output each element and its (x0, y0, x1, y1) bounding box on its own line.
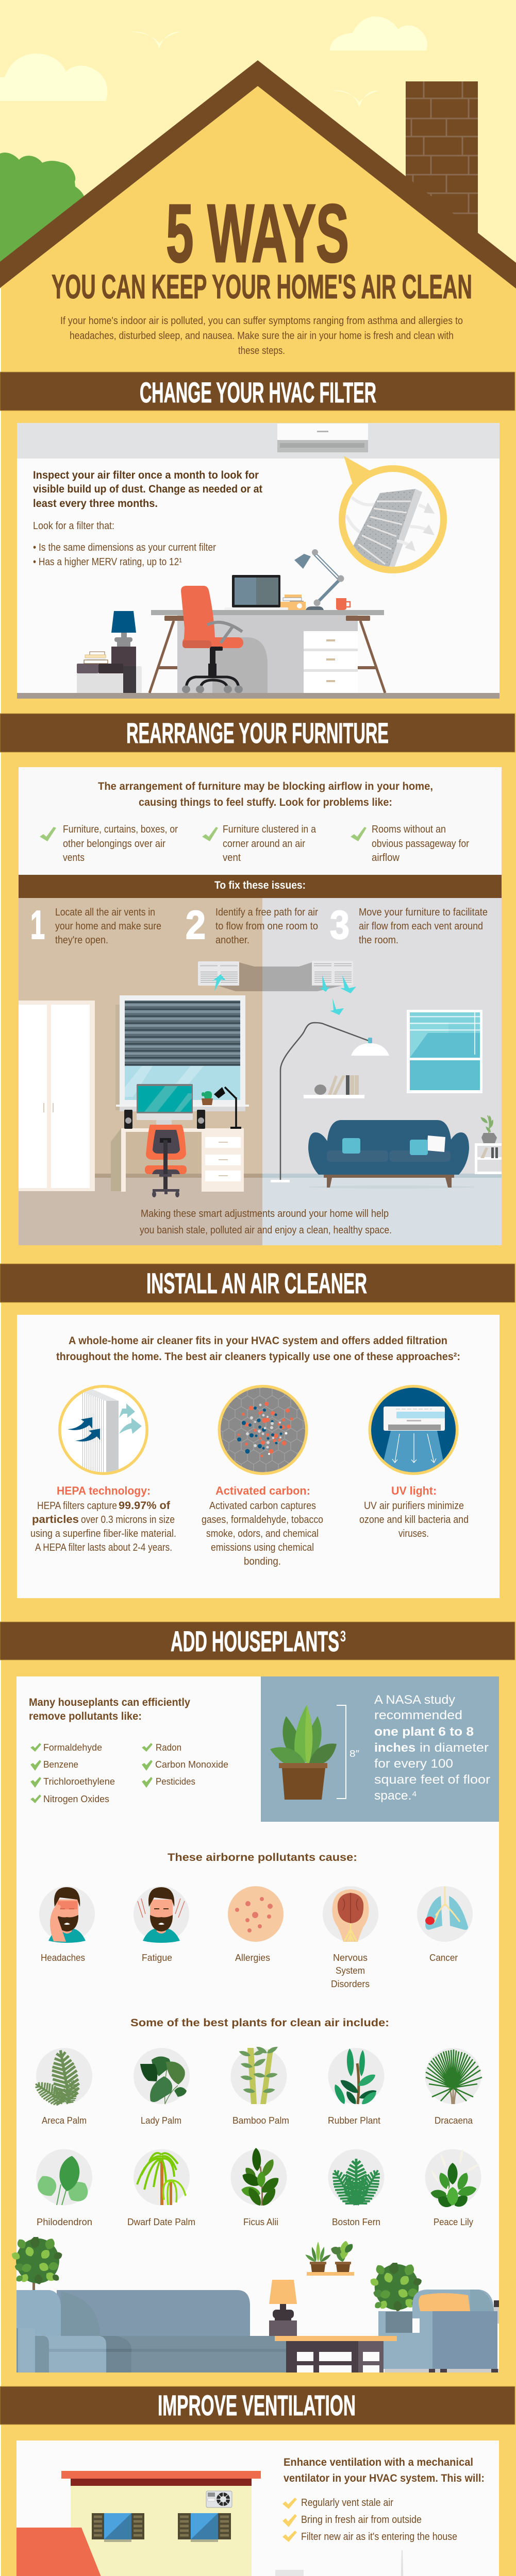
checklist: ventilator benefits: Bring in fresh air from outside (301, 2514, 422, 2526)
arrows: airflow (202, 974, 356, 1015)
icon: hepa filter (58, 1385, 148, 1479)
column: activated carbon text: Activated carbon: (215, 1484, 310, 1497)
panel: houseplants (10, 1676, 499, 2372)
icon: check 1 (40, 827, 56, 841)
column: uv light text (359, 1484, 469, 1539)
symptom: allergies (228, 1886, 284, 1963)
step 1: Locate all the air vents in (55, 906, 155, 918)
illustration: blue sofa (308, 1120, 475, 1189)
panel: room illustration with steps (19, 898, 502, 1245)
text block: inspect filter (33, 469, 262, 568)
plant: bamboo palm (231, 2045, 289, 2126)
column: hepa text: A HEPA filter lasts about 2-4 years. (35, 1541, 172, 1553)
illustration: coffee table (275, 2336, 397, 2372)
heading: air cleaner (56, 1335, 460, 1363)
illustration: large sofa (16, 2290, 287, 2372)
problem 2 (223, 823, 317, 863)
symptom: fatigue: Fatigue (142, 1952, 172, 1963)
illustration: imac and speakers (124, 1084, 205, 1129)
problem 3: obvious passageway for (372, 838, 469, 850)
column: activated carbon text: emissions using chemical (211, 1541, 314, 1553)
plant: philodendron (34, 2149, 93, 2227)
pollutants list: Many houseplants can efficiently (29, 1697, 190, 1708)
problem 2: vent (223, 852, 241, 863)
panel: air cleaner approaches (17, 1315, 500, 1598)
checklist: ventilator benefits: Regularly vent stale air (301, 2497, 393, 2509)
illustration: mug (336, 598, 350, 610)
plant: lady palm (134, 2048, 190, 2126)
step 1: they're open. (55, 934, 108, 946)
icon: activated carbon (218, 1385, 308, 1475)
heading: furniture (98, 781, 433, 808)
pollutants list (29, 1697, 228, 1804)
heading: ventilation (284, 2456, 485, 2484)
illustration: laptop (224, 575, 288, 610)
symptom: fatigue (134, 1886, 189, 1963)
icon: outdoor fan unit (206, 2491, 232, 2507)
symptom: nervous system disorders: Disorders (331, 1978, 370, 1989)
section banner: improve ventilation (0, 2386, 515, 2425)
heading: best plants: Some of the best plants for clean air include: (130, 2017, 389, 2029)
chimney (406, 81, 478, 293)
column: uv light text: UV air purifiers minimize (364, 1500, 464, 1512)
plant: bamboo palm: Bamboo Palm (232, 2115, 289, 2126)
pollutants list: remove pollutants like: (29, 1710, 142, 1722)
icon: 8 inch bracket (337, 1705, 360, 1799)
pollutants list: Formaldehyde (43, 1742, 102, 1753)
plant: dwarf date palm (127, 2149, 195, 2227)
step 3 (330, 902, 488, 947)
icon: vent right (312, 961, 353, 985)
column: hepa text: particles (32, 1514, 79, 1526)
column: uv light text: viruses. (398, 1528, 429, 1539)
plant: areca palm (31, 2048, 92, 2126)
step 3: Move your furniture to facilitate (359, 906, 488, 918)
pollutants list: Benzene (43, 1759, 78, 1770)
sky background (0, 0, 516, 289)
illustration: armchair and planter (378, 2290, 499, 2372)
panel: hvac filter room (17, 423, 500, 699)
plant: peace lily (425, 2148, 481, 2227)
illustration: skyline (252, 2550, 499, 2576)
step 2: 2 (186, 902, 206, 947)
window row top right (178, 2513, 231, 2542)
column: hepa text: over 0.3 microns in size (81, 1514, 175, 1526)
step 1: your home and make sure (55, 920, 161, 932)
section banner: install an air cleaner (0, 1264, 515, 1302)
plant: ficus alii (231, 2148, 287, 2227)
column: uv light text: UV light: (391, 1484, 437, 1497)
text: nasa recommendation (374, 1693, 490, 1803)
pollutants list: Radon (156, 1742, 181, 1753)
plant: boston fern (326, 2149, 386, 2227)
illustration: side table lamp (111, 611, 142, 693)
section banner: install an air cleaner: INSTALL AN AIR CLEANER (146, 1267, 367, 1299)
illustration: right tree (369, 2261, 423, 2312)
icon: potted plant (270, 1705, 337, 1800)
illustration: duct connecting vents (218, 962, 342, 991)
intro text: these steps. (238, 345, 285, 357)
illustration: office chair (181, 586, 243, 693)
icon: wall ac unit (277, 423, 368, 452)
roof (0, 60, 516, 289)
heading: ventilation: ventilator in your HVAC system. This will: (284, 2472, 485, 2484)
step 3: air flow from each vent around (359, 920, 483, 932)
step 2: Identify a free path for air (215, 906, 318, 918)
text block: inspect filter: • Is the same dimensions as your current filter (33, 541, 216, 553)
illustration: left tree (10, 2235, 63, 2291)
intro text: headaches, disturbed sleep, and nausea. Make sure the air in your home is fresh and clean with (70, 330, 454, 342)
problem 1: vents (63, 852, 85, 863)
plant: dwarf date palm: Dwarf Date Palm (127, 2216, 195, 2227)
column: activated carbon text: smoke, odors, and chemical (206, 1528, 319, 1539)
illustration: wall shelf with books (304, 1075, 364, 1098)
panel: ventilation (16, 2441, 499, 2576)
icon: vent left (198, 961, 239, 986)
text: nasa recommendation: A NASA study (374, 1693, 455, 1707)
column: activated carbon text: bonding. (244, 1555, 281, 1567)
sub-banner: to fix these issues: To fix these issues: (214, 879, 306, 891)
symptom: nervous system disorders: Nervous (333, 1952, 368, 1963)
step 1 (30, 902, 161, 947)
text block: inspect filter: Inspect your air filter once a month to look for (33, 469, 259, 481)
sub-banner: to fix these issues (19, 875, 502, 898)
plant: philodendron: Philodendron (37, 2216, 92, 2227)
plant: boston fern: Boston Fern (332, 2216, 380, 2227)
problem 3 (372, 823, 469, 863)
step 3: 3 (330, 902, 349, 947)
problem 3: Rooms without an (372, 823, 446, 835)
panel: problems (19, 767, 502, 875)
pollutants list: Trichloroethylene (43, 1776, 115, 1787)
problem 1 (63, 823, 178, 863)
symptom: headaches (39, 1886, 95, 1963)
illustration: study window (115, 995, 249, 1111)
title: 5 WAYS (166, 187, 349, 279)
plant: peace lily: Peace Lily (434, 2216, 474, 2227)
section banner: add houseplants (0, 1622, 515, 1660)
cloud: left (0, 54, 107, 101)
column: activated carbon text: gases, formaldehyde, tobacco (202, 1514, 323, 1526)
pollutants list: Pesticides (156, 1776, 195, 1787)
text: nasa recommendation: one plant 6 to 8 (374, 1725, 474, 1739)
text: nasa recommendation: for every 100 (374, 1757, 453, 1771)
illustration: shelf with potted plants (305, 2240, 355, 2276)
plant: areca palm: Areca Palm (42, 2115, 87, 2126)
icon: uv light (368, 1385, 459, 1475)
lower left house (16, 2528, 104, 2576)
illustration: floor lamp (271, 1023, 389, 1182)
problem 1: other belongings over air (63, 838, 165, 850)
tree behind roof (0, 152, 85, 273)
step 2 (186, 902, 318, 947)
heading: air cleaner: throughout the home. The best air cleaners typically use one of these approaches²: (56, 1351, 460, 1363)
section banner: change your hvac filter (0, 372, 515, 411)
text: nasa recommendation: space.⁴ (374, 1789, 417, 1803)
step 2: another. (215, 934, 249, 946)
problem 2: corner around an air (223, 838, 305, 850)
icon: magnified dirty filter (342, 456, 443, 572)
problem 1: Furniture, curtains, boxes, or (63, 823, 178, 835)
icon: bird right (332, 90, 379, 107)
heading: air cleaner: A whole-home air cleaner fits in your HVAC system and offers added filtration (69, 1335, 447, 1347)
symptom: nervous system disorders: System (336, 1965, 365, 1976)
text: nasa recommendation: inches (374, 1741, 415, 1755)
heading: ventilation: Enhance ventilation with a mechanical (284, 2456, 473, 2468)
text: closing note: Making these smart adjustments around your home will help (141, 1208, 389, 1219)
heading: furniture: The arrangement of furniture may be blocking airflow in your home, (98, 781, 433, 792)
pollutants list: Nitrogen Oxides (43, 1793, 109, 1804)
column: activated carbon text (202, 1484, 323, 1567)
problem 2: Furniture clustered in a (223, 823, 317, 835)
illustration: storage box and books (77, 652, 123, 693)
intro text: If your home's indoor air is polluted, you can suffer symptoms ranging from asthma and allergies to (60, 315, 463, 327)
plant: dracaena (425, 2048, 482, 2126)
column: activated carbon text: Activated carbon captures (209, 1500, 316, 1512)
text: closing note: you banish stale, polluted air and enjoy a clean, healthy space. (140, 1224, 392, 1236)
section banner: rearrange your furniture (0, 714, 515, 752)
icon: check 3 (351, 827, 367, 841)
text block: inspect filter: visible build up of dust. Change as needed or at (33, 483, 262, 495)
symptom: nervous system disorders (323, 1886, 378, 1989)
plant: rubber plant (328, 2048, 385, 2126)
column: hepa text: HEPA technology: (57, 1484, 151, 1497)
step 3: the room. (359, 934, 398, 946)
text: closing note (140, 1208, 392, 1236)
cloud: top right (330, 16, 427, 50)
section banner: improve ventilation: IMPROVE VENTILATION (158, 2389, 356, 2421)
text block: inspect filter: least every three months. (33, 498, 158, 510)
title (52, 187, 472, 306)
illustration: study chair (145, 1125, 187, 1197)
illustration: side shelf and plant (475, 1115, 502, 1174)
window row top left (92, 2513, 144, 2542)
section banner: add houseplants: ADD HOUSEPLANTS (171, 1625, 339, 1657)
symptom: cancer (417, 1886, 473, 1963)
illustration: desk (149, 610, 385, 693)
callout: nasa study (261, 1676, 499, 1822)
icon: check 2 (202, 827, 218, 841)
checklist: ventilator benefits (282, 2497, 457, 2543)
text: nasa recommendation: square feet of floor (374, 1773, 490, 1787)
text: nasa recommendation: recommended (374, 1708, 462, 1722)
text: nasa recommendation: in diameter (420, 1741, 489, 1755)
column: hepa text (30, 1484, 176, 1553)
text block: inspect filter: • Has a higher MERV rating, up to 12¹ (33, 556, 182, 568)
column: hepa text: 99.97% of (119, 1500, 171, 1512)
checklist: ventilator benefits: Filter new air as it's entering the house (301, 2531, 457, 2543)
icon: 8 inch bracket: 8″ (349, 1748, 360, 1759)
plant: dracaena: Dracaena (435, 2115, 473, 2126)
icon: bird left (130, 31, 181, 48)
column: hepa text: using a superfine fiber-like material. (30, 1528, 176, 1539)
symptom: headaches: Headaches (41, 1952, 85, 1963)
heading: pollutants cause: These airborne pollutants cause: (168, 1852, 357, 1863)
plant: lady palm: Lady Palm (141, 2115, 181, 2126)
illustration: wardrobe (19, 1001, 95, 1191)
illustration: desk lamp (294, 549, 344, 610)
section banner: add houseplants: 3 (340, 1628, 346, 1645)
symptom: allergies: Allergies (235, 1952, 270, 1963)
illustration: study desk (111, 1128, 244, 1192)
illustration: cactus and black lamp (202, 1087, 241, 1129)
column: uv light text: ozone and kill bacteria and (359, 1514, 469, 1526)
step 2: to flow from one room to (215, 920, 318, 932)
symptom: cancer: Cancer (429, 1952, 458, 1963)
plant: ficus alii: Ficus Alii (243, 2216, 278, 2227)
plant: rubber plant: Rubber Plant (328, 2115, 380, 2126)
column: hepa text: HEPA filters capture (37, 1500, 117, 1512)
illustration: apartment building (16, 2471, 261, 2576)
heading: furniture: causing things to feel stuffy. Look for problems like: (139, 796, 392, 808)
illustration: books and box on desk (280, 595, 306, 610)
step 1: 1 (30, 902, 45, 947)
illustration: living room window (407, 1010, 482, 1093)
intro text (60, 315, 463, 357)
illustration: table lamp (269, 2280, 297, 2336)
text block: inspect filter: Look for a filter that: (33, 520, 114, 532)
problem 3: airflow (372, 852, 400, 863)
pollutants list: Carbon Monoxide (155, 1759, 228, 1770)
